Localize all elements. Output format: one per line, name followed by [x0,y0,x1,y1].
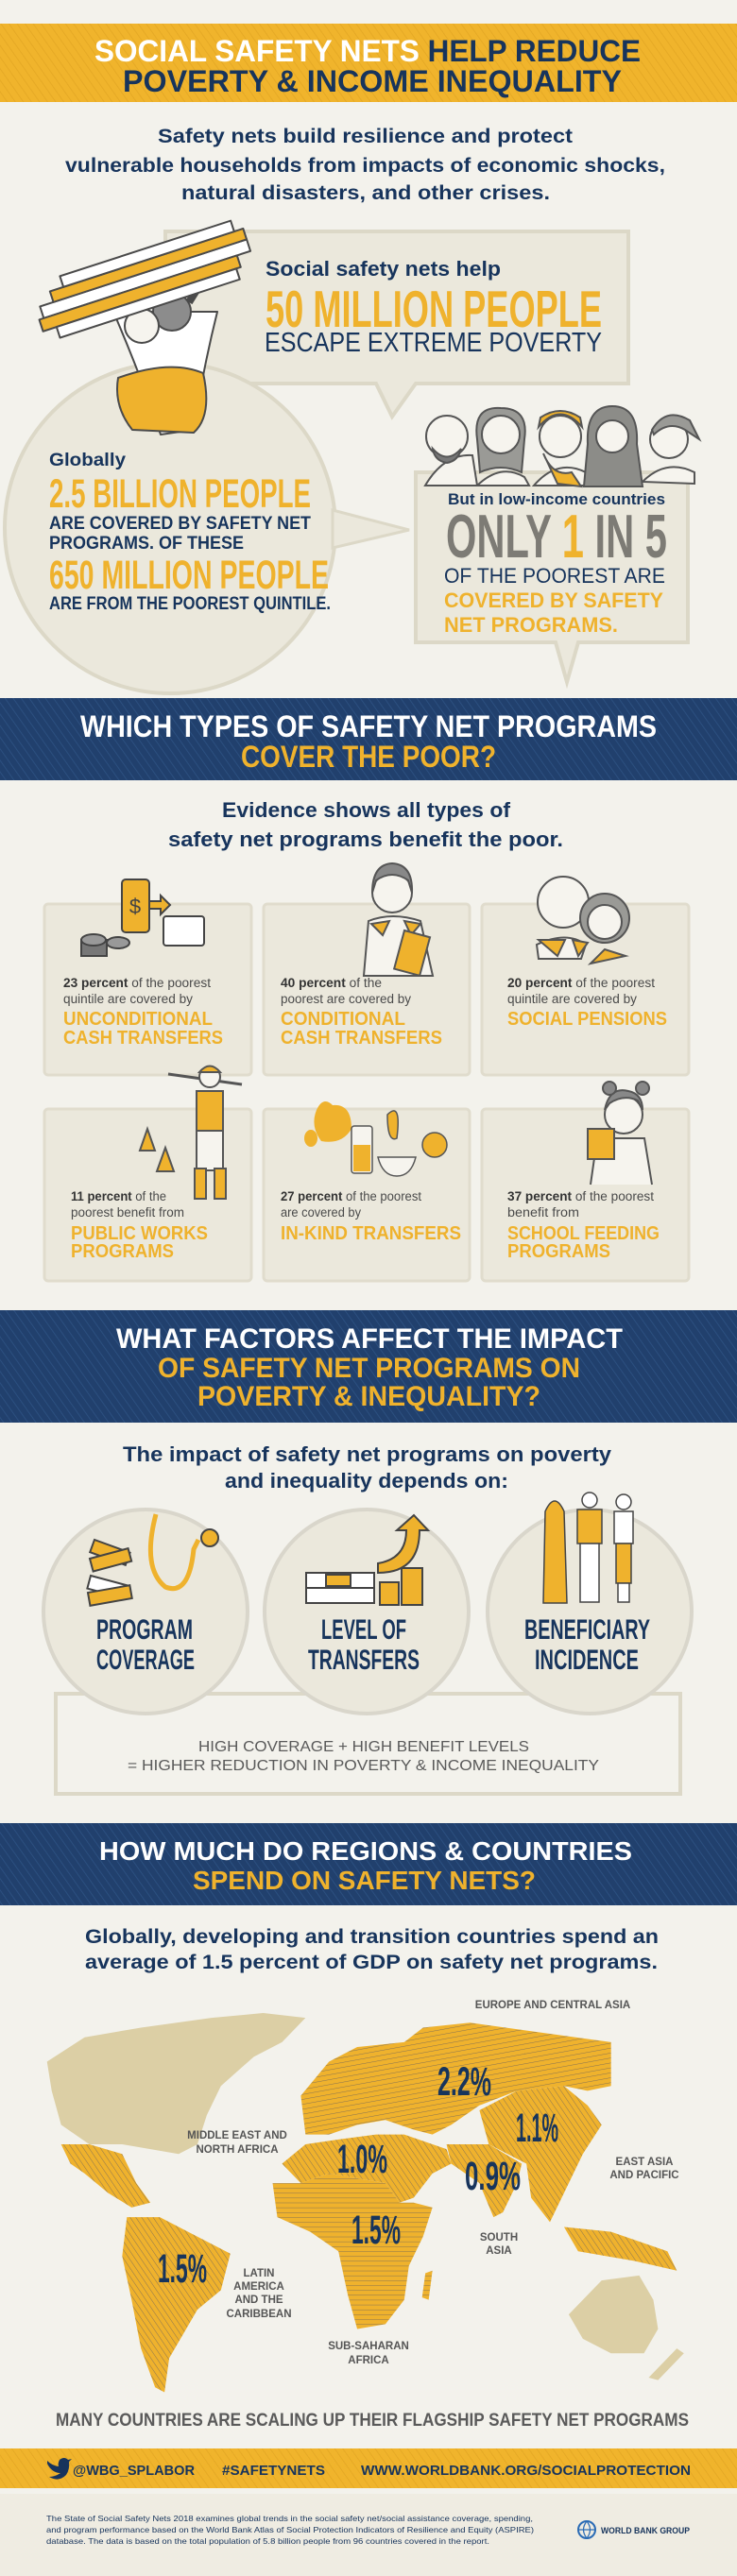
map labels: EAST ASIA [616,2157,673,2168]
factor: beneficiary incidence: BENEFICIARY [524,1614,650,1646]
card: school feeding programs: PROGRAMS [507,1241,610,1262]
icon: three people [543,1493,633,1603]
map labels: CARIBBEAN [227,2309,291,2320]
map percentages: 1.5% [351,2208,401,2253]
footnote: database. The data is based on the total population of 5.8 billion people from 96 countries covered in the report. [46,2536,489,2546]
map labels: AMERICA [233,2281,284,2293]
icon: money stack with arrow [306,1515,428,1605]
footnote: The State of Social Safety Nets 2018 examines global trends in the social safety net/social assistance coverage, spending, [46,2514,533,2523]
section band: which types: COVER THE POOR? [241,740,496,774]
map labels: AND THE [234,2295,283,2306]
icon: person carrying bundle of sticks [28,218,258,435]
subtitle: impact depends on [123,1442,612,1493]
map labels [187,2000,679,2366]
icon: worker with cones [140,1066,242,1199]
section band: what factors: POVERTY & INEQUALITY? [197,1381,540,1412]
formula box: HIGH COVERAGE + HIGH BENEFIT LEVELS [198,1739,529,1755]
card: public works programs: PUBLIC WORKS [71,1223,208,1244]
text: 50 million people: Social safety nets help [266,257,501,281]
card: in-kind transfers: 27 percent of the poorest [281,1189,421,1203]
subtitle: impact depends on: and inequality depends on: [225,1469,508,1493]
card: unconditional cash transfers: UNCONDITIONAL [63,1009,213,1030]
formula box: = HIGHER REDUCTION IN POVERTY & INCOME INEQUALITY [128,1758,599,1774]
card: in-kind transfers [281,1101,461,1244]
text: only 1 in 5 [444,490,667,637]
text: only 1 in 5: ONLY 1 IN 5 [446,502,667,571]
card: school feeding programs: SCHOOL FEEDING [507,1223,660,1244]
map percentages [158,2059,558,2292]
south asia [447,2144,522,2217]
card: social pensions: 20 percent of the poorest [507,976,655,990]
factor: beneficiary incidence: INCIDENCE [535,1645,639,1676]
factor: beneficiary incidence [488,1493,692,1714]
sub-saharan africa [273,2174,433,2329]
text: globally 2.5 billion: Globally [49,451,126,470]
title text: POVERTY & INCOME INEQUALITY [123,64,622,98]
subtitle: evidence: Evidence shows all types of [222,798,511,822]
middle east and north africa [282,2135,452,2203]
factor: level of transfers [265,1510,469,1714]
card: conditional cash transfers: CONDITIONAL [281,1009,405,1030]
card: conditional cash transfers: 40 percent of the [281,976,382,990]
map labels: MIDDLE EAST AND [187,2130,287,2141]
card: social pensions: quintile are covered by [507,992,637,1006]
card: conditional cash transfers [281,863,442,1049]
card: unconditional cash transfers: CASH TRANSFERS [63,1028,223,1049]
map labels: SUB-SAHARAN [328,2341,409,2352]
section band: what factors [0,1310,737,1423]
icon: five faces [425,406,699,486]
card: public works programs: poorest benefit from [71,1205,184,1220]
title text [94,34,641,98]
text: globally 2.5 billion: ARE COVERED BY SAFETY NET [49,514,311,534]
subtitle: global spending: Globally, developing and transition countries spend an [85,1926,659,1948]
footnote [46,2514,534,2546]
intro text: vulnerable households from impacts of economic shocks, [65,155,665,177]
footer band: @WBG_SPLABOR [73,2463,195,2479]
card: public works programs: 11 percent of the [71,1189,166,1203]
subtitle: global spending: average of 1.5 percent of GDP on safety net programs. [85,1952,658,1973]
text: globally 2.5 billion: PROGRAMS. OF THESE [49,534,244,554]
map percentages: 0.9% [465,2154,521,2199]
card: in-kind transfers: IN-KIND TRANSFERS [281,1223,461,1244]
factor: program coverage: PROGRAM [96,1614,193,1646]
section band: what factors: OF SAFETY NET PROGRAMS ON [158,1353,580,1384]
text: 50 million people: ESCAPE EXTREME POVERTY [265,328,602,358]
east asia [479,2086,602,2222]
map labels: LATIN [243,2268,275,2279]
card: unconditional cash transfers [63,879,223,1049]
map percentages: 1.0% [337,2137,387,2182]
text: only 1 in 5: OF THE POOREST ARE [444,564,665,588]
footer band: WWW.WORLDBANK.ORG/SOCIALPROTECTION [361,2463,691,2479]
text: 1.1% [516,2106,558,2151]
section band: how much spend: SPEND ON SAFETY NETS? [193,1866,536,1895]
icon: twitter bird [47,2458,72,2480]
card: unconditional cash transfers: quintile are covered by [63,992,193,1006]
icon: phone, coins, card: $ [129,895,141,918]
intro text: Safety nets build resilience and protect [158,126,573,147]
icon: child with cup [588,1082,652,1185]
card: school feeding programs: 37 percent of the poorest [507,1189,654,1203]
logo: world bank group [578,2521,690,2538]
factor: level of transfers: TRANSFERS [308,1645,420,1676]
card: in-kind transfers: are covered by [281,1205,361,1220]
footer band: #SAFETYNETS [222,2463,325,2479]
text: 50 million people [265,257,602,358]
card: conditional cash transfers: CASH TRANSFERS [281,1028,442,1049]
card: social pensions: SOCIAL PENSIONS [507,1009,667,1030]
icon: food items [304,1101,447,1176]
card: public works programs [71,1066,242,1262]
map labels: SOUTH [480,2232,518,2243]
icon: girl with books [364,863,433,976]
icon: books and stethoscope [87,1514,218,1606]
subtitle: impact depends on: The impact of safety net programs on poverty [123,1442,612,1466]
map labels: AND PACIFIC [609,2170,679,2181]
subtitle: evidence: safety net programs benefit the poor. [168,827,563,851]
subtitle: evidence [168,798,563,851]
icon: phone, coins, card [81,879,204,956]
section band: how much spend [0,1823,737,1905]
text: globally 2.5 billion [49,451,331,614]
section band: which types [0,698,737,780]
scaling up text: MANY COUNTRIES ARE SCALING UP THEIR FLAGSHIP SAFETY NET PROGRAMS [56,2411,689,2431]
central america [61,2144,150,2208]
card: conditional cash transfers: poorest are covered by [281,992,411,1006]
factor: program coverage: COVERAGE [96,1645,195,1676]
text: globally 2.5 billion: ARE FROM THE POOREST QUINTILE. [49,594,331,614]
footer band [0,2448,737,2488]
card: social pensions [507,877,667,1030]
map labels: EUROPE AND CENTRAL ASIA [475,2000,630,2011]
text: globally 2.5 billion: 650 MILLION PEOPLE [49,553,329,598]
card: school feeding programs [507,1082,660,1262]
card grid backgrounds [44,904,689,1281]
card: school feeding programs: benefit from [507,1205,579,1220]
intro text: natural disasters, and other crises. [181,182,550,204]
north america [47,2013,305,2154]
factor: program coverage [43,1510,248,1714]
formula box [56,1694,680,1794]
section band: which types: WHICH TYPES OF SAFETY NET PROGRAMS [80,709,657,743]
world map [47,2013,684,2392]
text: only 1 in 5: COVERED BY SAFETY [444,589,663,612]
section band: what factors: WHAT FACTORS AFFECT THE IMPACT [116,1323,623,1355]
map labels: ASIA [486,2245,512,2257]
section band: how much spend: HOW MUCH DO REGIONS & COUNTRIES [99,1836,632,1866]
south america [122,2217,231,2392]
subtitle: global spending [85,1926,659,1973]
title text: SOCIAL SAFETY NETS HELP REDUCE [94,34,641,68]
europe and central asia [300,2022,611,2135]
text: only 1 in 5: NET PROGRAMS. [444,613,618,637]
footnote: and program performance based on the World Bank Atlas of Social Protection Indicators of Resilience and Equity (ASPIRE) [46,2525,534,2534]
factor: level of transfers: LEVEL OF [321,1614,406,1646]
card: unconditional cash transfers: 23 percent of the poorest [63,976,211,990]
intro text [65,126,665,204]
map labels: NORTH AFRICA [196,2144,279,2156]
logo: world bank group: WORLD BANK GROUP [601,2526,690,2535]
map percentages: 1.5% [158,2246,207,2292]
speech bubbles background [5,231,688,693]
text: only 1 in 5: But in low-income countries [448,490,665,508]
map percentages: 2.2% [437,2059,491,2105]
card: public works programs: PROGRAMS [71,1241,174,1262]
icon: elderly couple [537,877,629,964]
text: globally 2.5 billion: 2.5 BILLION PEOPLE [49,471,311,517]
title band [0,24,737,102]
map labels: AFRICA [348,2355,389,2366]
australia [569,2276,658,2353]
